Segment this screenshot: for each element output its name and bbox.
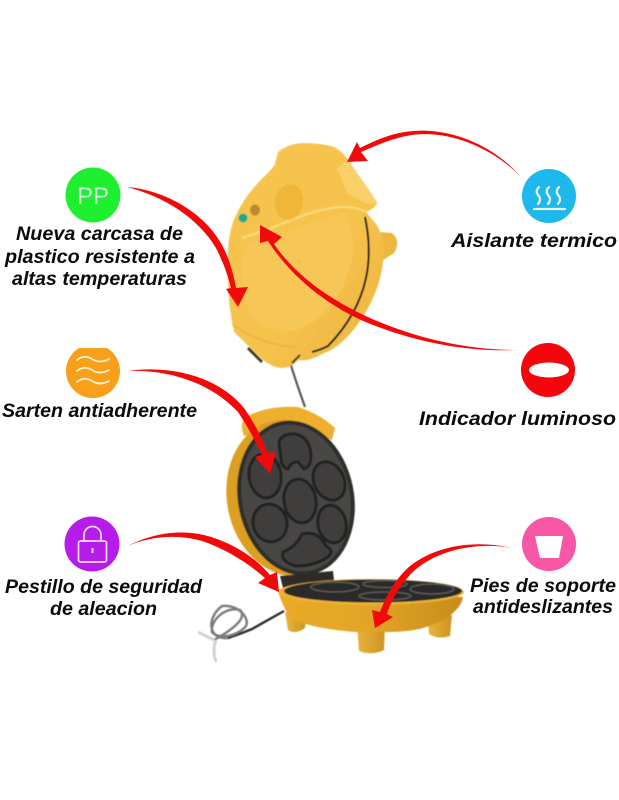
icon: PP: PP [77, 183, 109, 210]
icon: waves [66, 348, 120, 398]
power cord [198, 606, 284, 662]
arrow: non-slip feet [372, 544, 512, 628]
base body [278, 591, 463, 632]
lid fin [242, 407, 335, 440]
hinge [280, 571, 335, 596]
knob [272, 182, 306, 222]
heading: PP shell: Nueva carcasa de [16, 223, 183, 245]
heading: indicator light: Indicador luminoso [419, 408, 616, 430]
icon: PP [66, 168, 120, 222]
lid plate [224, 410, 368, 586]
arrow: heat insulation [347, 131, 520, 176]
heading: safety latch [5, 576, 203, 620]
base rim and plate [278, 579, 464, 605]
heading: safety latch: Pestillo de seguridad [5, 576, 203, 598]
heading: safety latch: de aleacion [50, 598, 157, 620]
icon: heat [522, 169, 576, 223]
heading: heat insulation: Aislante termico [450, 230, 617, 252]
feet [285, 612, 452, 653]
icon: foot [522, 517, 576, 571]
heading: non-slip feet: Pies de soporte [470, 575, 616, 597]
product: open appliance [198, 407, 464, 662]
lid back shell [213, 409, 365, 587]
heading: non-slip feet [470, 575, 616, 618]
arrow: safety latch [128, 532, 279, 592]
animal-shaped wells [246, 434, 351, 566]
arrow: PP shell [127, 187, 248, 307]
product: closed appliance [228, 143, 397, 407]
icon: lock [64, 516, 120, 572]
indicator lights [238, 204, 260, 222]
arrow: non-stick pan [128, 369, 276, 474]
heading: PP shell: plastico resistente a [4, 246, 195, 268]
heading: non-stick pan: Sarten antiadherente [2, 400, 197, 422]
icon: indicator light [521, 343, 575, 397]
arrow: indicator light [260, 225, 518, 350]
heading: PP shell [4, 223, 195, 290]
heading: non-slip feet: antideslizantes [473, 596, 613, 618]
base wells [311, 580, 454, 600]
heading: PP shell: altas temperaturas [12, 268, 187, 290]
